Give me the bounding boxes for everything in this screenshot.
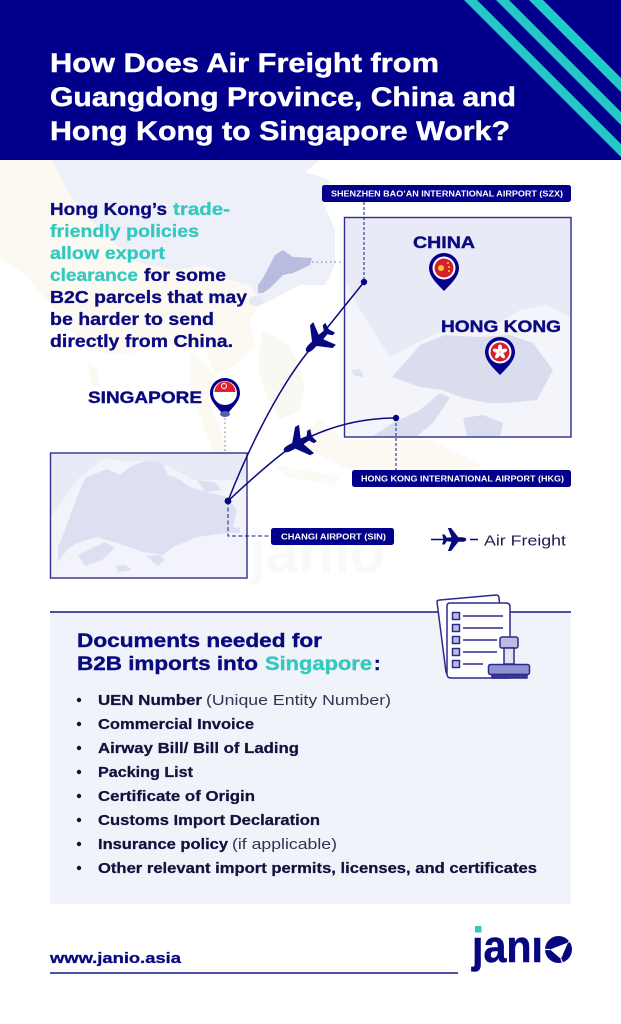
flight routes bbox=[228, 282, 396, 501]
callout text: be harder to send bbox=[50, 309, 214, 329]
heading: : bbox=[374, 653, 380, 675]
callout text: clearance bbox=[50, 265, 138, 285]
heading: B2B imports into bbox=[77, 653, 258, 675]
logo: janio: jani bbox=[471, 921, 543, 972]
route endpoints bbox=[225, 279, 399, 504]
legend: air freight: Air Freight bbox=[484, 532, 567, 550]
background regional map bbox=[0, 160, 483, 490]
icon: Singapore pin bbox=[210, 378, 240, 417]
label: Changi airport: CHANGI AIRPORT (SIN) bbox=[281, 532, 386, 542]
heading bbox=[77, 630, 380, 675]
document checklist: Customs Import Declaration bbox=[98, 813, 320, 829]
document checklist: Packing List bbox=[98, 765, 193, 781]
heading: Documents needed for bbox=[77, 630, 322, 652]
label: Hong Kong: HONG KONG bbox=[441, 317, 561, 336]
label: Hong Kong airport: HONG KONG INTERNATIONAL AIRPORT (HKG) bbox=[361, 474, 564, 484]
title bbox=[50, 48, 516, 146]
callout text: directly from China. bbox=[50, 331, 233, 351]
callout text: friendly policies bbox=[50, 221, 199, 241]
label: China: CHINA bbox=[413, 233, 475, 252]
document checklist bbox=[77, 693, 537, 877]
label: Shenzhen airport: SHENZHEN BAO’AN INTERNATIONAL AIRPORT (SZX) bbox=[331, 190, 563, 198]
icon: plane to Shenzhen bbox=[295, 317, 341, 363]
watermark: janio bbox=[249, 520, 385, 585]
callout text: B2C parcels that may bbox=[50, 287, 247, 307]
legend: air freight bbox=[431, 528, 567, 551]
callout text bbox=[50, 199, 247, 351]
callout text: Hong Kong’s bbox=[50, 199, 167, 219]
icon: Hong Kong pin bbox=[485, 337, 515, 375]
callout text: trade- bbox=[173, 199, 230, 219]
heading: Singapore bbox=[265, 653, 372, 675]
document checklist: (if applicable) bbox=[232, 837, 337, 853]
label: Singapore: SINGAPORE bbox=[88, 388, 202, 407]
icon: plane to Hong Kong bbox=[276, 421, 321, 465]
panel: documents needed bbox=[50, 612, 571, 904]
callout text: for some bbox=[144, 265, 226, 285]
map highlight: Guangdong bbox=[258, 250, 312, 293]
title: Guangdong Province, China and bbox=[50, 82, 516, 112]
label: Hong Kong airport bbox=[352, 470, 571, 487]
website url: www.janio.asia bbox=[49, 950, 182, 967]
document checklist: Other relevant import permits, licenses, and certificates bbox=[98, 861, 537, 877]
label: Changi airport bbox=[271, 528, 394, 545]
title: How Does Air Freight from bbox=[50, 48, 439, 78]
icon: China pin bbox=[429, 253, 459, 291]
label: Shenzhen airport bbox=[322, 185, 571, 202]
inset map: China and Hong Kong bbox=[344, 217, 571, 437]
document checklist: Certificate of Origin bbox=[98, 789, 255, 805]
document checklist: Commercial Invoice bbox=[98, 717, 254, 733]
header banner bbox=[0, 0, 621, 160]
title: Hong Kong to Singapore Work? bbox=[50, 116, 510, 146]
document checklist: Insurance policy bbox=[98, 837, 228, 853]
footer rule bbox=[50, 972, 458, 974]
document checklist: UEN Number bbox=[98, 693, 202, 709]
inset map: Singapore bbox=[50, 453, 247, 578]
callout text: allow export bbox=[50, 243, 165, 263]
document checklist: Airway Bill/ Bill of Lading bbox=[98, 741, 299, 757]
document checklist: (Unique Entity Number) bbox=[206, 693, 391, 709]
leader lines bbox=[225, 202, 396, 536]
icon: documents and stamp bbox=[437, 595, 530, 678]
logo: janio bbox=[466, 918, 572, 972]
